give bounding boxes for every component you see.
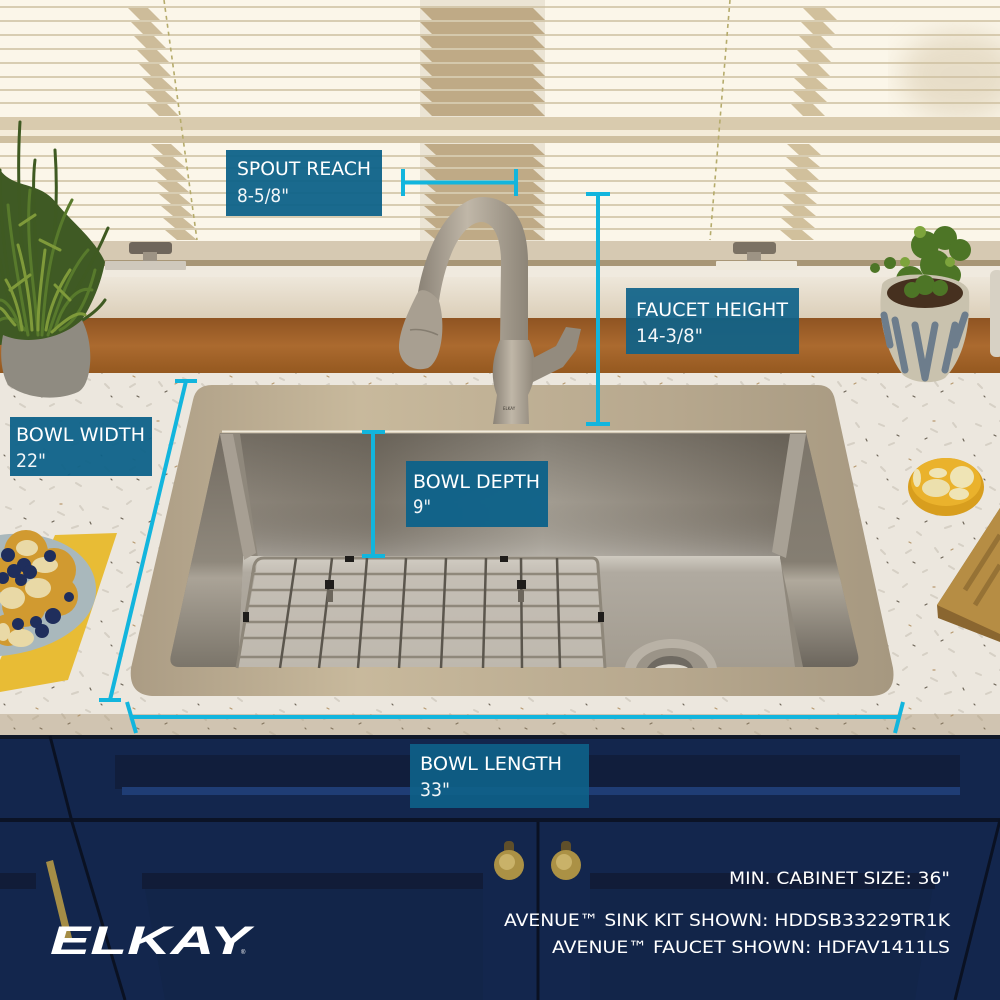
label: spout reach <box>226 150 382 216</box>
label: bowl length <box>410 744 589 808</box>
logo: Elkay: ELKAY <box>50 919 255 963</box>
cabinet knob left <box>494 841 524 880</box>
window latch left <box>105 242 186 270</box>
label: spout reach: 8-5/8" <box>237 185 289 207</box>
specs text: AVENUE™ SINK KIT SHOWN: HDDSB33229TR1K <box>504 911 951 931</box>
plant pot left <box>1 320 90 398</box>
label: bowl depth: BOWL DEPTH <box>413 471 540 493</box>
label: faucet height: 14-3/8" <box>636 325 703 347</box>
banana bowl <box>908 458 984 516</box>
specs text: AVENUE™ FAUCET SHOWN: HDFAV1411LS <box>552 938 950 958</box>
window sill <box>0 241 1000 319</box>
wood ledge <box>0 318 1000 374</box>
plant pot right <box>880 275 969 382</box>
label: bowl length: 33" <box>420 779 450 801</box>
dimension line: bowl length <box>127 702 903 733</box>
window latch right <box>716 242 797 270</box>
label: bowl width: BOWL WIDTH <box>16 424 145 446</box>
logo: Elkay <box>50 919 255 963</box>
cabinet handle <box>46 860 72 940</box>
specs text <box>504 869 951 958</box>
window blinds <box>0 0 1000 243</box>
label: faucet height: FAUCET HEIGHT <box>636 299 788 321</box>
plant left <box>0 122 108 398</box>
plant right <box>870 226 1000 382</box>
cutting board <box>937 508 1000 642</box>
label: spout reach: SPOUT REACH <box>237 158 371 180</box>
label: bowl length: BOWL LENGTH <box>420 753 562 775</box>
napkin <box>0 533 117 692</box>
logo: Elkay: ® <box>241 949 246 956</box>
specs text: MIN. CABINET SIZE: 36" <box>729 869 950 889</box>
label: bowl depth <box>406 461 548 527</box>
label: faucet height <box>626 288 799 354</box>
cabinets <box>0 735 1000 1000</box>
dimension line: spout reach <box>403 169 516 196</box>
dimension line: bowl width <box>99 381 197 700</box>
label: bowl width <box>10 417 152 476</box>
label: bowl depth: 9" <box>413 496 431 518</box>
grid clips <box>243 556 604 622</box>
sink bowl <box>170 432 858 667</box>
dimension line: faucet height <box>586 194 610 424</box>
dimension line: bowl depth <box>362 432 385 556</box>
vase edge <box>990 270 1000 357</box>
faucet: ELKAY <box>503 406 516 411</box>
bottom grid <box>237 558 605 668</box>
sink deck <box>131 385 894 696</box>
plate of waffles <box>0 530 96 656</box>
cabinet knob right <box>551 841 581 880</box>
label: bowl width: 22" <box>16 450 46 472</box>
faucet <box>399 197 581 424</box>
drain <box>625 639 717 668</box>
countertop <box>0 373 1000 735</box>
